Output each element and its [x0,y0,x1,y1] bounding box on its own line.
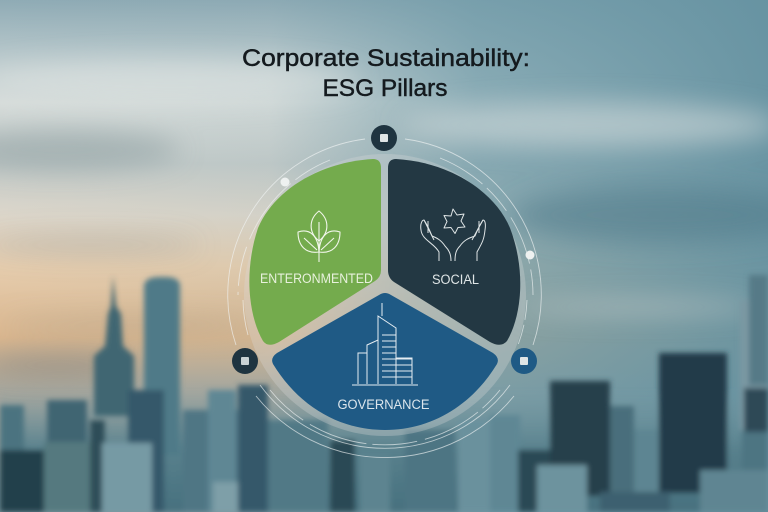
outer ring lines [228,139,541,458]
label: governance: GOVERNANCE [338,397,430,412]
panel: social segment [388,159,520,345]
background: blurred city skyline [0,275,768,512]
title [242,45,530,102]
node: right [511,348,537,374]
icon: hands and star [421,209,485,261]
title: ESG Pillars [322,75,448,102]
node: left [232,348,258,374]
panel: governance segment [272,293,498,430]
title: Corporate Sustainability: [242,45,530,72]
label: social: SOCIAL [432,272,479,287]
pale disc behind the segments [244,154,526,436]
panel: environment segment [249,159,381,345]
icon: leaf sprout [298,211,340,262]
icon: office towers [352,303,418,385]
node: top [371,125,397,151]
label: environment: ENTERONMENTED [260,271,373,286]
ring dots [280,178,534,260]
